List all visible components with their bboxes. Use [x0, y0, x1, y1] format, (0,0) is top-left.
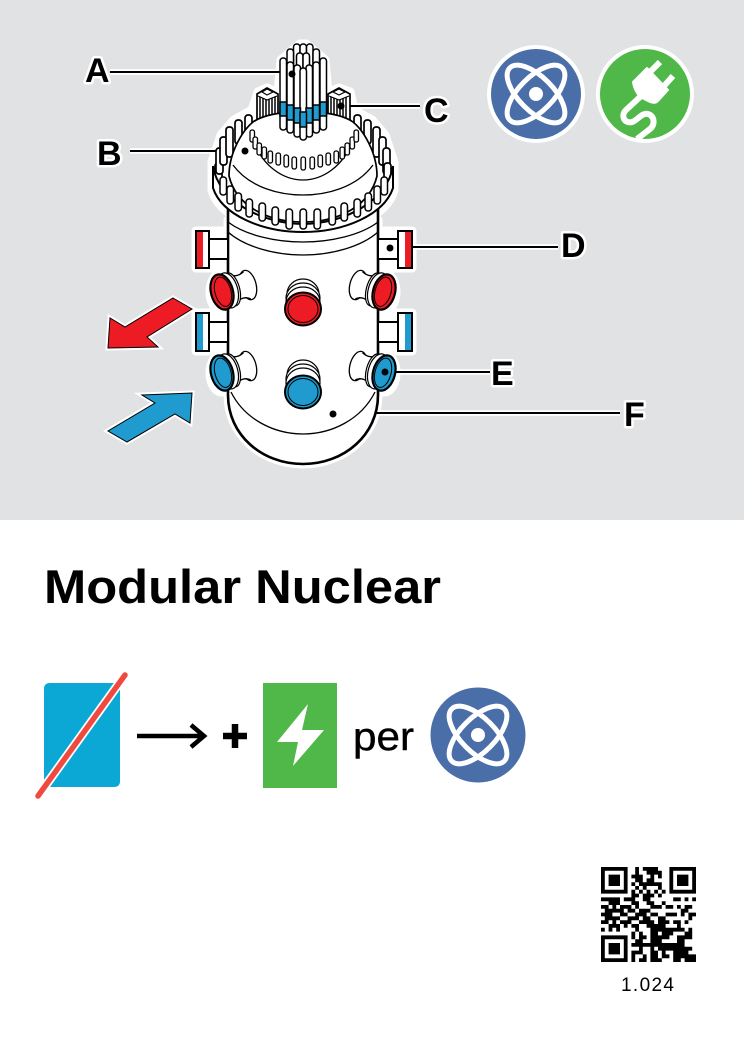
arrow: [137, 725, 204, 747]
leader lines: [110, 72, 620, 413]
QR reference number: 1.024: [621, 975, 674, 996]
plus sign: [223, 724, 247, 748]
arrow: hot outflow: [108, 298, 192, 348]
equation row: [38, 675, 526, 796]
label F: F: [624, 396, 645, 434]
icon: atom badge: [487, 45, 585, 143]
grey background panel: [0, 0, 744, 520]
QR code: [601, 869, 696, 960]
icon: crossed out water panel: [38, 675, 125, 796]
side rod bundle left: [257, 88, 278, 126]
label E: E: [491, 355, 514, 393]
blue centre nozzle: [285, 360, 321, 408]
label C: C: [424, 92, 449, 130]
icon: energy panel: [263, 683, 337, 788]
title: Modular Nuclear: [44, 560, 441, 613]
back flange bolts: [215, 115, 391, 185]
blue nozzle right: [346, 347, 399, 393]
central fuel rods: [280, 44, 326, 140]
reactor vessel: [196, 44, 412, 464]
reactor white halo: [196, 44, 412, 464]
pointer dots: [242, 70, 394, 418]
flange rim: [213, 166, 393, 232]
dome contour lines: [228, 137, 378, 434]
label A: A: [85, 52, 110, 90]
red nozzle right: [346, 266, 399, 312]
side rod bundle right: [328, 88, 350, 126]
side flange pipes: [196, 231, 412, 351]
red centre nozzle: [285, 279, 321, 326]
per text: per: [353, 715, 414, 759]
icon: power plug badge: [596, 45, 694, 143]
blue nozzle left: [207, 347, 260, 393]
dome: [229, 112, 377, 222]
icon: atom: [430, 688, 526, 782]
flange colour strips: [197, 232, 411, 350]
label D: D: [561, 227, 586, 265]
vessel body and bottom head: [228, 195, 378, 464]
front flange bolts: [220, 177, 388, 229]
arrow: cold inflow: [108, 393, 192, 442]
control rod ring: [250, 130, 358, 170]
red nozzle left: [207, 266, 260, 312]
label B: B: [97, 135, 122, 173]
